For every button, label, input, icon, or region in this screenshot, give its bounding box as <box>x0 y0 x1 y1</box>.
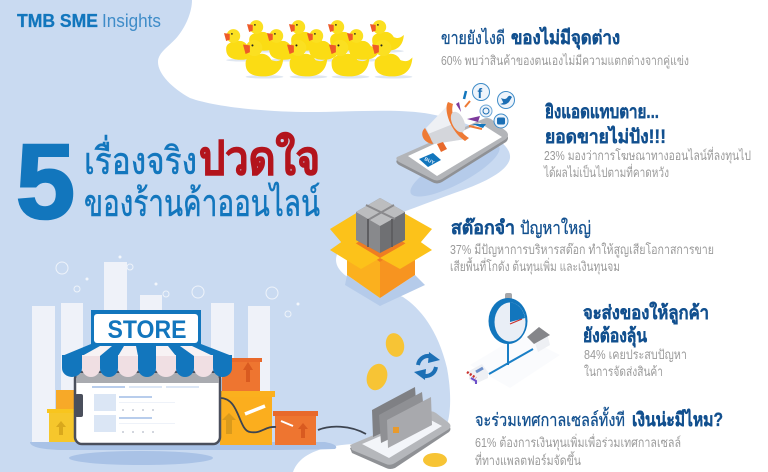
text block 1 <box>441 26 689 69</box>
stopwatch <box>488 293 528 344</box>
text block 3: ปัญหาใหญ่ <box>520 217 591 238</box>
icon: facebook: f <box>478 85 482 101</box>
shop <box>467 364 488 384</box>
icon: stopwatch delivery <box>467 293 560 388</box>
text block 5: 61% ต้องการเงินทุนเพิ่มเพื่อร่วมเทศกาลเซลล์ <box>475 434 681 451</box>
phone storefront <box>75 372 220 444</box>
background blob <box>0 0 510 472</box>
text block 1: 60% พบว่าสินค้าของตนเองไม่มีความแตกต่างจากคู่แข่ง <box>441 53 689 69</box>
text block 5: จะร่วมเทศกาลเซลล์ทั้งที <box>475 407 625 430</box>
text block 2: ยิงแอดแทบตาย... <box>545 102 659 123</box>
coins and refresh icon <box>363 331 447 467</box>
skyline <box>32 262 270 442</box>
text block 2 <box>543 102 751 180</box>
text block 3: เสียพื้นที่โกดัง ต้นทุนเพิ่ม และเงินทุนจม <box>450 257 620 275</box>
main title: เรื่องจริง <box>84 135 197 183</box>
store sign <box>91 310 201 346</box>
ground shadows <box>30 442 336 450</box>
logo: TMB SME <box>17 10 98 31</box>
icon: open box with stock <box>330 198 432 306</box>
logo <box>17 10 161 31</box>
icon: phone with megaphone: BUY <box>423 156 436 167</box>
text block 5 <box>475 407 723 468</box>
icon: instagram <box>494 114 508 128</box>
text block 2: ได้ผลไม่เป็นไปตามที่คาดหวัง <box>543 163 669 180</box>
house <box>527 327 550 352</box>
boxes <box>47 358 318 445</box>
logo: Insights <box>102 10 161 31</box>
text block 4: ยังต้องลุ้น <box>583 325 647 348</box>
main title: ปวดใจ <box>199 131 320 184</box>
store sign: STORE <box>108 316 186 344</box>
bubbles <box>56 262 291 317</box>
icon: phone with megaphone <box>396 84 514 206</box>
text block 1: ของไม่มีจุดต่าง <box>511 26 620 50</box>
icon: twitter <box>498 92 514 108</box>
main title <box>16 123 320 241</box>
main title: ของร้านค้าออนไลน์ <box>84 182 320 225</box>
text block 1: ขายยังไงดี <box>441 27 505 48</box>
awning <box>62 344 232 377</box>
text block 3 <box>450 217 714 275</box>
ducks <box>224 20 412 79</box>
text block 4: ในการจัดส่งสินค้า <box>584 364 663 379</box>
text block 2: ยอดขายไม่ปัง!!! <box>545 125 666 148</box>
cable <box>220 398 366 434</box>
text block 4: 84% เคยประสบปัญหา <box>584 347 687 362</box>
main title: 5 <box>16 123 75 241</box>
icon: phone with credit cards <box>350 387 450 469</box>
text block 4 <box>583 301 709 379</box>
store illustration <box>30 256 366 465</box>
text block 5: เงินน่ะมีไหม? <box>632 408 723 431</box>
text block 3: สต๊อกจำ <box>451 217 515 239</box>
icon: whatsapp <box>480 105 492 117</box>
text block 4: จะส่งของให้ลูกค้า <box>583 301 709 325</box>
text block 3: 37% มีปัญหาการบริหารสต๊อก ทำให้สูญเสียโอกาสการขาย <box>450 242 714 258</box>
text block 5: ที่ทางแพลตฟอร์มจัดขึ้น <box>475 451 581 468</box>
